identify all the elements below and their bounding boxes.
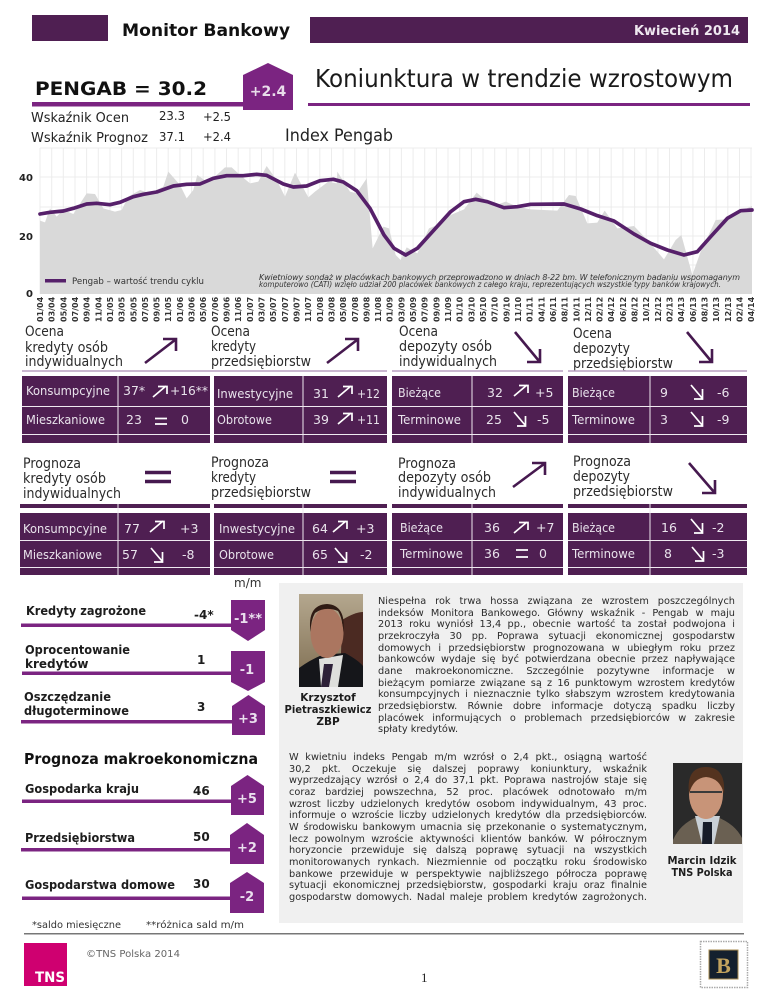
heading: Ocena depozyty osob indywidualnych	[399, 324, 497, 370]
text block: Pietraszkiewicz commentary: bieżącym pomiarze związane są z 16 punktowym wzrostem kredytów	[378, 678, 735, 689]
table: depozyty osob indywidualnych (ocena)	[392, 376, 563, 443]
x axis month labels: 04/14	[747, 296, 756, 322]
heading: Prognoza depozyty osob indywidualnych: Prognoza	[398, 456, 456, 472]
x axis month labels: 11/07	[304, 297, 313, 322]
x axis month labels: 08/13	[700, 297, 710, 322]
x axis month labels: 11/06	[234, 296, 243, 322]
table: kredyty przedsiebiorstw (ocena): +12	[357, 386, 380, 401]
x axis month labels: 03/07	[258, 297, 266, 322]
table: kredyty przedsiebiorstw (ocena): Obrotowe	[217, 412, 272, 427]
table: depozyty osob indywidualnych (prognoza)	[392, 504, 563, 575]
table: kredyty osob indywidualnych (ocena): Mieszkaniowe	[26, 412, 105, 427]
chart title: Index Pengab	[285, 126, 393, 146]
table: kredyty przedsiebiorstw (prognoza): 65	[312, 547, 328, 562]
x axis month labels: 07/05	[141, 296, 150, 322]
table: depozyty osob indywidualnych (prognoza): +7	[536, 520, 554, 535]
x axis month labels: 01/05	[106, 296, 115, 322]
footnotes: *saldo miesięczne	[32, 920, 121, 931]
axis labels: 0	[26, 289, 33, 300]
heading: Ocena depozyty przedsiebiorstw	[573, 326, 673, 372]
x axis month labels: 03/10	[467, 296, 476, 322]
arrow: down	[515, 332, 540, 362]
sub indicators: +2.5	[203, 109, 231, 124]
x axis month labels: 11/05	[164, 296, 173, 322]
text block: Idzik commentary: horyzoncie przewiduje się dalszą poprawę sytuacji na wszystkich	[289, 845, 647, 856]
name: Marcin Idzik TNS Polska: Marcin Idzik	[668, 855, 737, 867]
heading: Prognoza kredyty przedsiebiorstw: Prognoza	[211, 455, 269, 471]
text block: Pietraszkiewicz commentary: placówek informujących o problemach przedsiębiorców w zakresie	[378, 713, 735, 724]
table: kredyty przedsiebiorstw (ocena): Inwestycyjne	[217, 386, 293, 401]
sub indicators: +2.4	[203, 129, 231, 144]
sub indicators: 23.3	[159, 108, 185, 123]
text block: Idzik commentary: monitorowanych rynkach. Niezmiennie od początku roku środowisko	[289, 857, 647, 868]
table: depozyty osob indywidualnych (prognoza): 36	[484, 546, 500, 561]
name: Marcin Idzik TNS Polska: TNS Polska	[672, 867, 732, 879]
sub indicators	[31, 108, 231, 146]
table: depozyty przedsiebiorstw (prognoza)	[568, 504, 747, 575]
logo: TNS: TNS	[35, 970, 65, 986]
heading: Prognoza kredyty osob indywidualnych: Prognoza	[23, 456, 81, 472]
heading: Ocena depozyty osob indywidualnych: Ocena	[399, 324, 438, 340]
row: Gospodarka kraju: +5	[237, 792, 257, 807]
heading: Ocena kredyty przedsiebiorstw: Ocena	[211, 324, 250, 340]
x axis month labels: 03/09	[397, 296, 406, 322]
text block: Pietraszkiewicz commentary: domowych i przedsiębiorstw prognozowana w ubiegłym roku przez	[378, 643, 735, 654]
x axis month labels: 05/05	[129, 296, 138, 322]
table: depozyty przedsiebiorstw (prognoza): 16	[661, 520, 677, 535]
x axis month labels: 07/07	[281, 297, 290, 322]
x axis month labels: 02/13	[666, 297, 674, 322]
footnotes	[32, 919, 244, 931]
heading: Ocena depozyty przedsiebiorstw: Ocena	[573, 326, 612, 342]
text block: Pietraszkiewicz commentary: przekroczyła 30 pp. Poprawa sytuacji ekonomicznej gospodarstw	[378, 631, 735, 642]
table: depozyty osob indywidualnych (prognoza): Bieżące	[400, 520, 443, 535]
heading: Ocena kredyty osob indywidualnych: indywidualnych	[25, 354, 123, 370]
x axis month labels: 05/08	[339, 296, 348, 322]
x axis month labels: 06/13	[689, 297, 698, 322]
logo: TNS	[24, 943, 67, 986]
heading: Prognoza depozyty przedsiebiorstw: przedsiębiorstw	[573, 484, 673, 500]
survey note: komputerowo (CATI) wzięło udział 200 placówek bankowych z całego kraju, reprezentujących wszystkie typy banków krajowych.	[259, 279, 721, 289]
x axis month labels: 08/11	[561, 296, 570, 322]
heading: Prognoza kredyty osob indywidualnych	[23, 456, 121, 502]
x axis month labels: 09/10	[502, 296, 511, 322]
x axis month labels: 02/12	[596, 297, 605, 322]
x axis month labels: 07/08	[351, 296, 360, 322]
table: depozyty przedsiebiorstw (prognoza): 8	[664, 546, 672, 561]
x axis month labels: 04/12	[607, 297, 616, 322]
heading: Ocena kredyty przedsiebiorstw: kredyty	[211, 339, 256, 355]
row: Oszczedzanie dlugoterminowe: 3	[197, 700, 205, 714]
text block: Idzik commentary: W środowisku bankowym umacnia się przekonanie o systematycznym,	[289, 822, 647, 833]
line: trend	[40, 174, 752, 255]
text block: Idzik commentary: lecz powolnym wzroście aktywności klientów banków. W półrocznym	[289, 834, 647, 845]
x axis month labels: 01/09	[386, 296, 395, 322]
x axis month labels: 04/11	[537, 296, 546, 322]
text block: Pietraszkiewicz commentary: indeksów Monitora Bankowego. Główny wskaźnik - Pengab w maju	[378, 608, 735, 619]
heading: Prognoza kredyty przedsiebiorstw: kredyty	[211, 470, 256, 486]
x axis month labels: 09/07	[292, 297, 302, 322]
table: depozyty osob indywidualnych (ocena): +5	[535, 385, 553, 400]
table: depozyty osob indywidualnych (ocena): Bieżące	[398, 385, 441, 400]
row: Gospodarka kraju: Gospodarka kraju	[25, 782, 139, 796]
table: kredyty przedsiebiorstw (ocena): 39	[313, 412, 329, 427]
text block: Idzik commentary: wyprzedzający wzrósł o 2,4 do 37,1 pkt. Poprawa nastrojów staje się	[289, 775, 647, 786]
name: Krzysztof Pietraszkiewicz ZBP: Krzysztof	[300, 692, 356, 704]
logo: Zwiazek Bankow Polskich: B	[716, 953, 731, 978]
row: Oszczedzanie dlugoterminowe: Oszczędzanie	[24, 690, 111, 704]
x axis month labels: 02/14	[736, 296, 744, 322]
name: Marcin Idzik TNS Polska	[668, 855, 737, 879]
text block: Idzik commentary: 30,2 pkt. Oczekuje się dalszej poprawy koniunktury, wskaźnik	[289, 764, 647, 775]
text block: Idzik commentary: gospodarstw domowych. Nadal maleje problem kredytów zagrożonych.	[289, 892, 647, 903]
table: kredyty osob indywidualnych (prognoza): Mieszkaniowe	[23, 547, 102, 562]
x axis month labels: 05/04	[59, 296, 68, 322]
x axis month labels: 11/10	[514, 296, 523, 322]
text block: Pietraszkiewicz commentary: przedsiębiorstw. Równie dobre informacje dotyczą spadku liczby	[378, 701, 735, 712]
arrow: up	[327, 339, 358, 363]
table: depozyty przedsiebiorstw (ocena): -6	[717, 385, 730, 400]
table: kredyty osob indywidualnych (ocena): Konsumpcyjne	[26, 383, 110, 398]
x axis month labels: 01/07	[246, 297, 255, 322]
heading: Prognoza depozyty przedsiebiorstw: Prognoza	[573, 454, 631, 470]
header: logo block	[32, 15, 108, 41]
table: depozyty przedsiebiorstw (ocena): -9	[717, 412, 730, 427]
text block: Pietraszkiewicz commentary: Niespełna rok trwa hossa związana ze wzrostem poszczególnych	[378, 596, 735, 607]
x axis month labels: 10/13	[712, 297, 721, 322]
survey note: Kwietniowy sondaż w placówkach bankowych przeprowadzono w dniach 8-22 bm. W telefonicznym badaniu wspomaganym	[259, 272, 740, 282]
heading: Ocena kredyty osob indywidualnych	[25, 324, 123, 370]
text block: Pietraszkiewicz commentary: spłaty kredytów.	[378, 724, 458, 735]
x axis month labels: 05/10	[479, 296, 488, 322]
row: Kredyty zagrozone: Kredyty zagrożone	[26, 604, 146, 618]
table: depozyty przedsiebiorstw (ocena): Terminowe	[571, 412, 635, 427]
arrow: up	[145, 339, 176, 363]
x axis month labels: 01/06	[176, 296, 185, 322]
text block: Idzik commentary: informuje o wzroście liczby udzielonych kredytów dla przedsiębiorców.	[289, 810, 647, 821]
x axis month labels: 11/04	[94, 296, 103, 322]
heading: Ocena kredyty osob indywidualnych: kredyty osób	[25, 340, 108, 356]
table: depozyty przedsiebiorstw (ocena)	[568, 376, 747, 443]
x axis month labels: 03/04	[48, 296, 57, 322]
x axis month labels: 11/08	[374, 296, 383, 322]
row: Gospodarka kraju: 46	[193, 784, 210, 798]
main title	[308, 64, 750, 106]
heading: Ocena kredyty przedsiebiorstw: przedsiębiorstw	[211, 354, 311, 370]
table: kredyty osob indywidualnych (ocena)	[22, 376, 210, 443]
heading: Prognoza depozyty osob indywidualnych: indywidualnych	[398, 485, 496, 501]
header rules	[22, 370, 747, 372]
page number: 1	[421, 970, 428, 985]
table: kredyty osob indywidualnych (prognoza): +3	[180, 521, 198, 536]
x axis month labels: 01/04	[36, 296, 45, 322]
sub indicators: 37.1	[159, 129, 185, 144]
table: depozyty osob indywidualnych (prognoza): 36	[484, 520, 500, 535]
x axis month labels	[36, 296, 756, 322]
x axis month labels: 12/11	[584, 296, 593, 322]
row: Przedsiebiorstwa	[21, 823, 264, 864]
x axis month labels: 05/07	[269, 297, 278, 322]
x axis month labels: 10/12	[642, 297, 651, 322]
table: depozyty osob indywidualnych (prognoza): Terminowe	[399, 546, 463, 561]
text block: Pietraszkiewicz commentary: konsumpcyjnych i nieznacznie tylko słabszym wzrostem kredytowania	[378, 689, 735, 700]
heading: Prognoza depozyty osob indywidualnych: depozyty osób	[398, 470, 491, 486]
table: depozyty osob indywidualnych (prognoza): 0	[539, 546, 547, 561]
x axis month labels: 10/11	[572, 296, 581, 322]
name: Krzysztof Pietraszkiewicz ZBP	[284, 692, 372, 728]
table: depozyty przedsiebiorstw (prognoza): -3	[712, 546, 724, 561]
row: Oprocentowanie kredytow: kredytów	[25, 657, 89, 671]
x axis month labels: 05/09	[409, 296, 418, 322]
table: kredyty osob indywidualnych (prognoza): Konsumpcyjne	[23, 521, 107, 536]
row: Oprocentowanie kredytow	[22, 643, 265, 691]
name: Krzysztof Pietraszkiewicz ZBP: ZBP	[316, 716, 340, 728]
row: Oszczedzanie dlugoterminowe: długoterminowe	[24, 704, 129, 718]
heading: Prognoza kredyty przedsiebiorstw	[211, 455, 311, 501]
table: kredyty przedsiebiorstw (prognoza): Obrotowe	[219, 547, 274, 562]
text block: Pietraszkiewicz commentary: 2013 roku wyniósł 13,4 pp., obecnie wartość ta został podwojona i	[378, 619, 735, 630]
row: Gospodarka kraju	[22, 775, 264, 815]
text block: Pietraszkiewicz commentary: bankowców wydaje się być potwierdzana obecnie przez napływające	[378, 654, 735, 665]
name: Krzysztof Pietraszkiewicz ZBP: Pietraszkiewicz	[284, 704, 372, 716]
heading: Ocena kredyty osob indywidualnych: Ocena	[25, 324, 64, 340]
row: Przedsiebiorstwa: +2	[237, 841, 257, 856]
table: kredyty przedsiebiorstw (ocena): 31	[313, 386, 329, 401]
survey note	[259, 272, 740, 289]
table: kredyty osob indywidualnych (prognoza): 77	[124, 521, 140, 536]
x axis month labels: 04/13	[677, 297, 686, 322]
table: depozyty przedsiebiorstw (prognoza): Bieżące	[572, 520, 615, 535]
x axis month labels: 06/11	[549, 296, 558, 322]
x axis month labels: 03/06	[188, 296, 197, 322]
heading: Prognoza makroekonomiczna: Prognoza makroekonomiczna	[24, 750, 258, 768]
table: depozyty osob indywidualnych (ocena): 25	[486, 412, 502, 427]
PENGAB headline with badge	[32, 63, 293, 110]
text block: Pietraszkiewicz commentary: dane makroekonomiczne. Szczególnie pozytywne informacje w	[378, 666, 735, 677]
text block: Idzik commentary: coraz bardziej powszechna, 52 proc. placówek odnotowało m/m	[289, 787, 647, 798]
arrow: up	[513, 463, 545, 487]
table: kredyty osob indywidualnych (ocena): +16**	[170, 383, 208, 398]
axis labels: 40	[19, 173, 33, 184]
table: depozyty osob indywidualnych (ocena): -5	[537, 412, 549, 427]
x axis month labels: 11/09	[444, 296, 453, 322]
x axis month labels: 01/10	[456, 296, 465, 322]
table: kredyty przedsiebiorstw (prognoza): +3	[356, 521, 374, 536]
heading: Ocena depozyty osob indywidualnych: indywidualnych	[399, 354, 497, 370]
heading: Ocena depozyty przedsiebiorstw: przedsiębiorstw	[573, 356, 673, 372]
row: Oprocentowanie kredytow: Oprocentowanie	[25, 643, 130, 657]
x axis month labels: 09/04	[83, 296, 92, 322]
row: Gospodarstwa domowe: -2	[240, 890, 254, 905]
table: depozyty osob indywidualnych (ocena): Terminowe	[397, 412, 461, 427]
table: depozyty przedsiebiorstw (prognoza): -2	[712, 520, 724, 535]
table: kredyty przedsiebiorstw (prognoza): Inwestycyjne	[219, 521, 295, 536]
table: depozyty przedsiebiorstw (ocena): 3	[660, 412, 668, 427]
x axis month labels: 09/09	[432, 296, 441, 322]
row: Gospodarstwa domowe: 30	[193, 877, 210, 891]
table: depozyty przedsiebiorstw (ocena): 9	[660, 385, 668, 400]
heading: Prognoza kredyty osob indywidualnych: indywidualnych	[23, 486, 121, 502]
heading: Prognoza depozyty przedsiebiorstw: depozyty	[573, 469, 630, 485]
row: Oszczedzanie dlugoterminowe: +3	[238, 712, 258, 727]
text block: Idzik commentary	[289, 752, 647, 903]
axis labels	[19, 173, 33, 300]
main title: Koniunktura w trendzie wzrostowym	[315, 64, 733, 93]
icon: equals	[145, 472, 171, 482]
table: kredyty osob indywidualnych (ocena): 23	[126, 412, 142, 427]
forecast rules	[20, 504, 747, 508]
x axis month labels: 07/06	[211, 296, 220, 322]
x axis month labels: 01/11	[526, 296, 535, 322]
table: kredyty przedsiebiorstw (prognoza)	[214, 504, 387, 575]
row: Kredyty zagrozone: -1**	[234, 612, 262, 627]
footer rule	[24, 933, 744, 934]
header: date bar	[310, 17, 748, 43]
text block: Pietraszkiewicz commentary	[378, 596, 735, 735]
row: Gospodarstwa domowe: Gospodarstwa domowe	[25, 878, 175, 892]
label m/m: m/m	[234, 576, 261, 590]
axis labels: 20	[19, 232, 33, 243]
row: Kredyty zagrozone: -4*	[194, 608, 214, 622]
heading: Prognoza kredyty osob indywidualnych: kredyty osób	[23, 471, 106, 487]
copyright: ©TNS Polska 2014	[86, 949, 180, 960]
arrow: down	[687, 332, 712, 362]
x axis month labels: 07/09	[421, 296, 430, 322]
chart legend: Pengab – wartość trendu cyklu	[72, 276, 204, 287]
x axis month labels: 12/13	[724, 297, 733, 322]
area: monthly index values	[40, 166, 752, 294]
table: kredyty osob indywidualnych (prognoza): -8	[182, 547, 195, 562]
x axis month labels: 07/10	[491, 296, 500, 322]
heading: Prognoza depozyty przedsiebiorstw	[573, 454, 673, 500]
table: kredyty osob indywidualnych (prognoza)	[20, 504, 210, 575]
header: date bar: Kwiecień 2014	[634, 24, 740, 39]
x axis month labels: 06/12	[619, 297, 628, 322]
table: kredyty przedsiebiorstw (ocena): +11	[357, 412, 380, 427]
row: Przedsiebiorstwa: 50	[193, 830, 210, 844]
table: depozyty przedsiebiorstw (ocena): Bieżące	[572, 385, 615, 400]
sub indicators: Wskaźnik Prognoz	[31, 131, 148, 146]
row: Kredyty zagrozone	[21, 600, 265, 641]
row: Oszczedzanie dlugoterminowe	[21, 690, 265, 735]
table: depozyty przedsiebiorstw (prognoza): Terminowe	[571, 546, 635, 561]
table: kredyty osob indywidualnych (prognoza): 57	[122, 547, 138, 562]
table: depozyty osob indywidualnych (ocena): 32	[487, 385, 503, 400]
table: kredyty przedsiebiorstw (ocena)	[214, 376, 387, 443]
x axis month labels: 05/06	[199, 296, 208, 322]
text block: Idzik commentary: wzrost liczby udzielonych kredytów osobom indywidualnym, 43 proc.	[289, 799, 647, 810]
logo: Zwiazek Bankow Polskich	[700, 942, 748, 988]
heading: Prognoza kredyty przedsiebiorstw: przedsiębiorstw	[211, 485, 311, 501]
heading: Ocena depozyty przedsiebiorstw: depozyty	[573, 341, 630, 357]
x axis month labels: 08/12	[631, 297, 640, 322]
heading: Ocena depozyty osob indywidualnych: depozyty osób	[399, 339, 492, 355]
photo: Krzysztof Pietraszkiewicz	[299, 594, 363, 687]
row: Gospodarstwa domowe	[22, 872, 264, 913]
x axis month labels: 12/12	[654, 297, 663, 322]
footnotes: **różnica sald m/m	[146, 919, 244, 931]
PENGAB headline with badge: PENGAB = 30.2	[35, 78, 207, 100]
table: kredyty osob indywidualnych (ocena): 0	[181, 412, 189, 427]
x axis month labels: 01/08	[316, 296, 325, 322]
table: kredyty osob indywidualnych (ocena): 37*	[123, 383, 145, 398]
x axis month labels: 07/04	[71, 296, 80, 322]
text block: Idzik commentary: bankowe przewiduje w perspektywie najbliższego półrocza poprawę	[289, 869, 647, 880]
photo: Marcin Idzik	[673, 763, 742, 844]
header: title Monitor Bankowy: Monitor Bankowy	[122, 21, 290, 41]
table: kredyty przedsiebiorstw (prognoza): 64	[312, 521, 328, 536]
x axis month labels: 09/08	[362, 296, 371, 322]
x axis month labels: 09/06	[222, 296, 232, 322]
heading: Prognoza depozyty osob indywidualnych	[398, 456, 496, 501]
text block: Idzik commentary: sytuacji ekonomicznej przedsiębiorstw, gospodarki kraju oraz finalnie	[289, 880, 647, 891]
x axis month labels: 03/08	[328, 296, 336, 322]
arrow: down	[689, 463, 715, 493]
grey commentary panel	[279, 583, 743, 923]
row: Oprocentowanie kredytow: 1	[197, 653, 205, 667]
table: kredyty przedsiebiorstw (prognoza): -2	[360, 547, 372, 562]
icon: equals	[330, 472, 356, 482]
x axis month labels: 09/05	[153, 296, 162, 322]
line chart: Index Pengab	[19, 148, 752, 300]
row: Przedsiebiorstwa: Przedsiębiorstwa	[25, 831, 135, 845]
sub indicators: Wskaźnik Ocen	[31, 111, 129, 126]
heading: Ocena kredyty przedsiebiorstw	[211, 324, 311, 370]
text block: Idzik commentary: W kwietniu indeks Pengab m/m wzrósł o 2,4 pkt., osiągną wartość	[289, 752, 647, 763]
PENGAB headline with badge: +2.4	[250, 84, 287, 100]
row: Oprocentowanie kredytow: -1	[240, 663, 254, 678]
x axis month labels: 03/05	[118, 296, 127, 322]
